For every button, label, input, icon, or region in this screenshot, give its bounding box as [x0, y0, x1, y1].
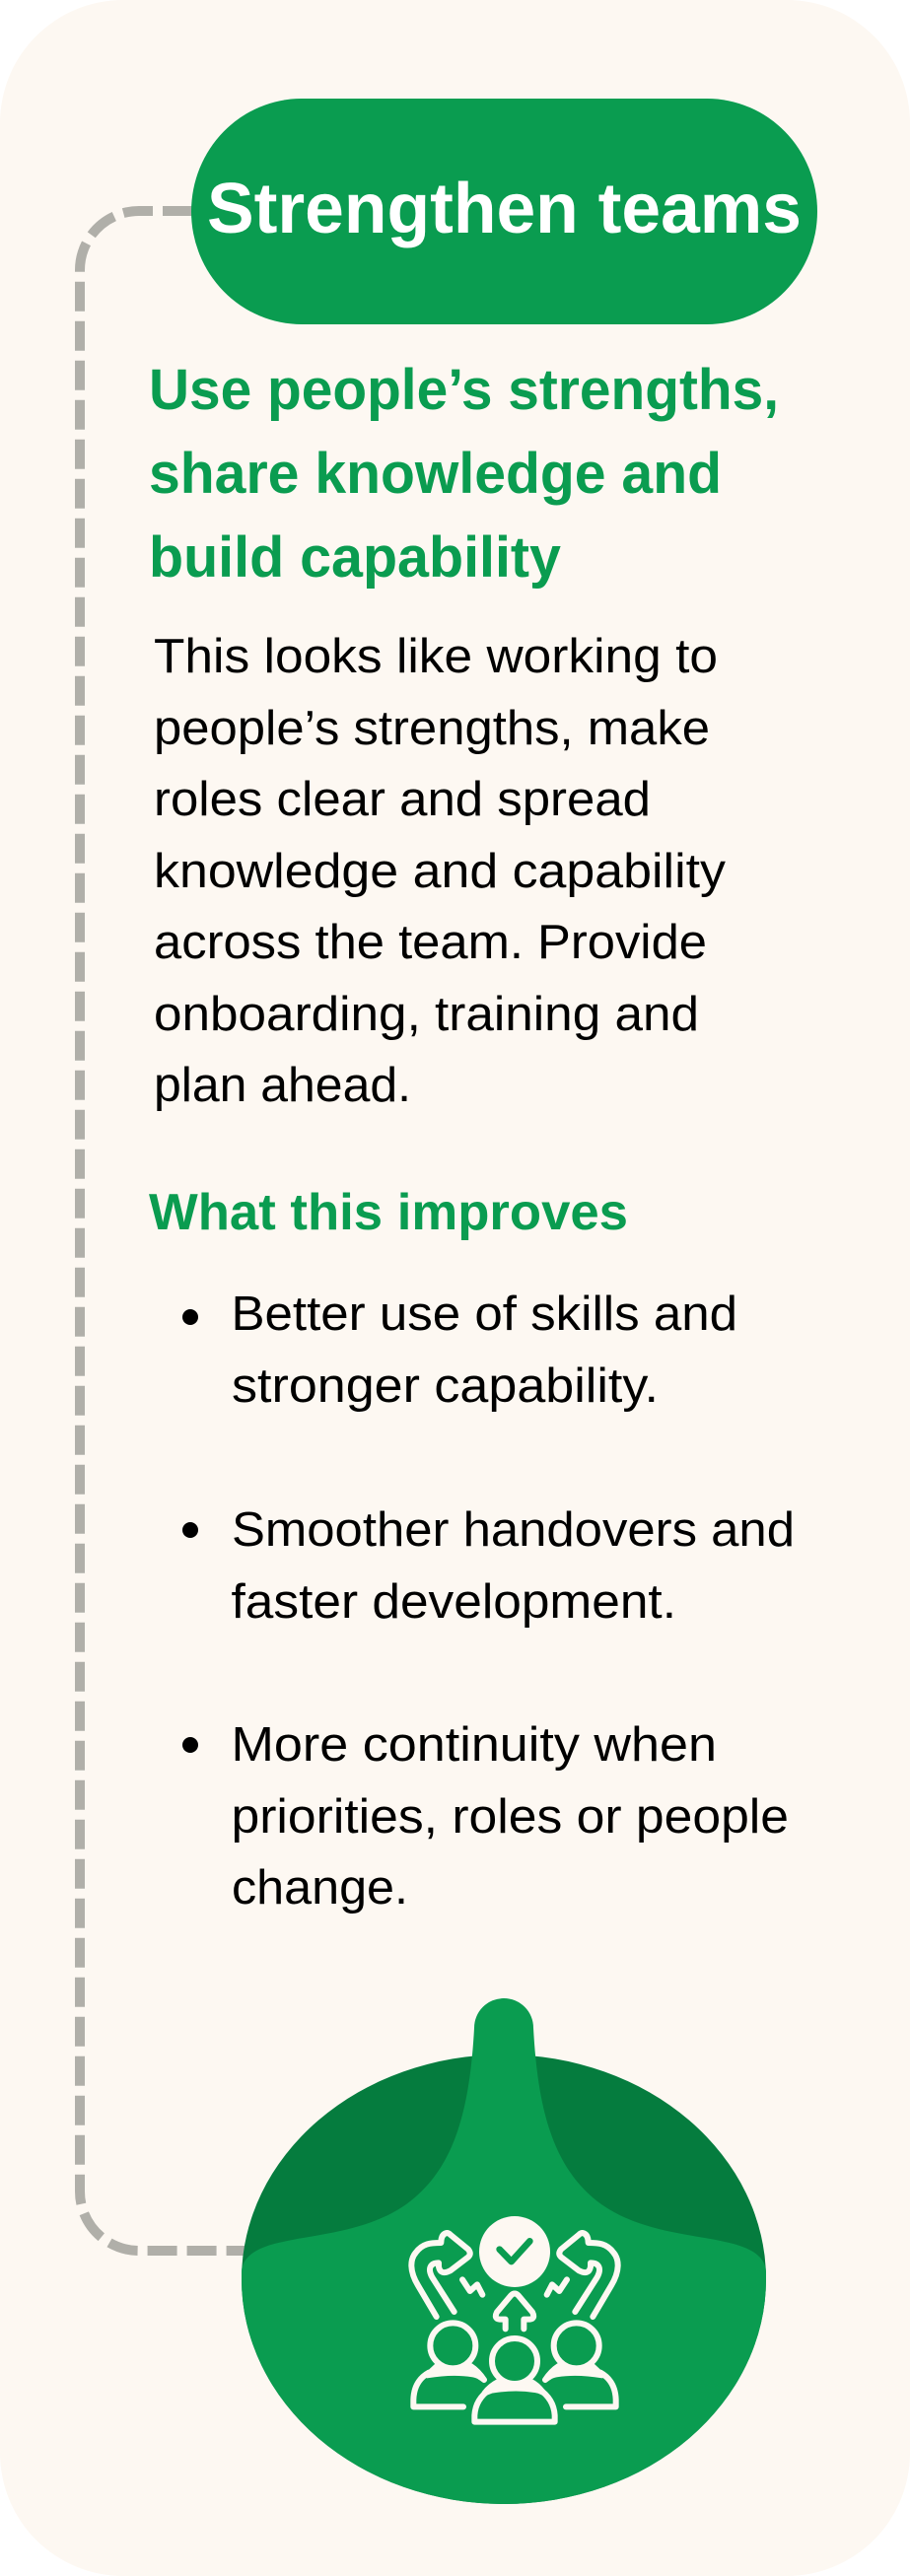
heading: use people's strengths: build capability — [149, 525, 561, 590]
body paragraph: This looks like working to — [154, 629, 718, 683]
title pill: Strengthen teams — [207, 170, 802, 248]
body paragraph: onboarding, training and — [154, 987, 699, 1041]
bullet 2: Smoother handovers and — [232, 1502, 795, 1557]
dashed connector from title pill to icon blob — [80, 211, 246, 2251]
check badge — [479, 2216, 550, 2287]
up arrow — [496, 2293, 533, 2329]
right person — [545, 2323, 616, 2406]
left person — [413, 2323, 484, 2406]
bullet list of improvements — [182, 1287, 795, 1915]
title pill — [191, 99, 817, 324]
left curved arrow and spark — [411, 2233, 482, 2317]
icon blob: green droplet circle — [242, 1998, 766, 2504]
bullet 1: Better use of skills and — [231, 1287, 737, 1341]
heading: use people's strengths: share knowledge and — [149, 442, 722, 506]
body paragraph: plan ahead. — [154, 1058, 411, 1112]
right curved arrow and spark — [547, 2233, 618, 2317]
heading: use people's strengths — [149, 358, 779, 590]
body paragraph: people’s strengths, make — [154, 701, 710, 755]
bullet 1: stronger capability. — [232, 1358, 659, 1413]
body paragraph: knowledge and capability — [154, 844, 726, 898]
bullet 2 — [182, 1502, 795, 1629]
body paragraph — [154, 629, 726, 1112]
bullet 2: faster development. — [231, 1574, 676, 1629]
bullet 3: change. — [232, 1860, 408, 1915]
centre person — [474, 2338, 555, 2422]
body paragraph: roles clear and spread — [154, 772, 651, 826]
heading: use people's strengths: Use people’s strengths, — [149, 358, 779, 422]
bullet 1 — [182, 1287, 737, 1413]
body paragraph: across the team. Provide — [154, 915, 707, 969]
icon: team with arrows and check — [411, 2216, 618, 2422]
bullet 3 — [182, 1717, 789, 1915]
bullet 3: priorities, roles or people — [231, 1789, 789, 1844]
heading: what this improves: What this improves — [149, 1184, 628, 1241]
bullet 3: More continuity when — [231, 1717, 717, 1772]
